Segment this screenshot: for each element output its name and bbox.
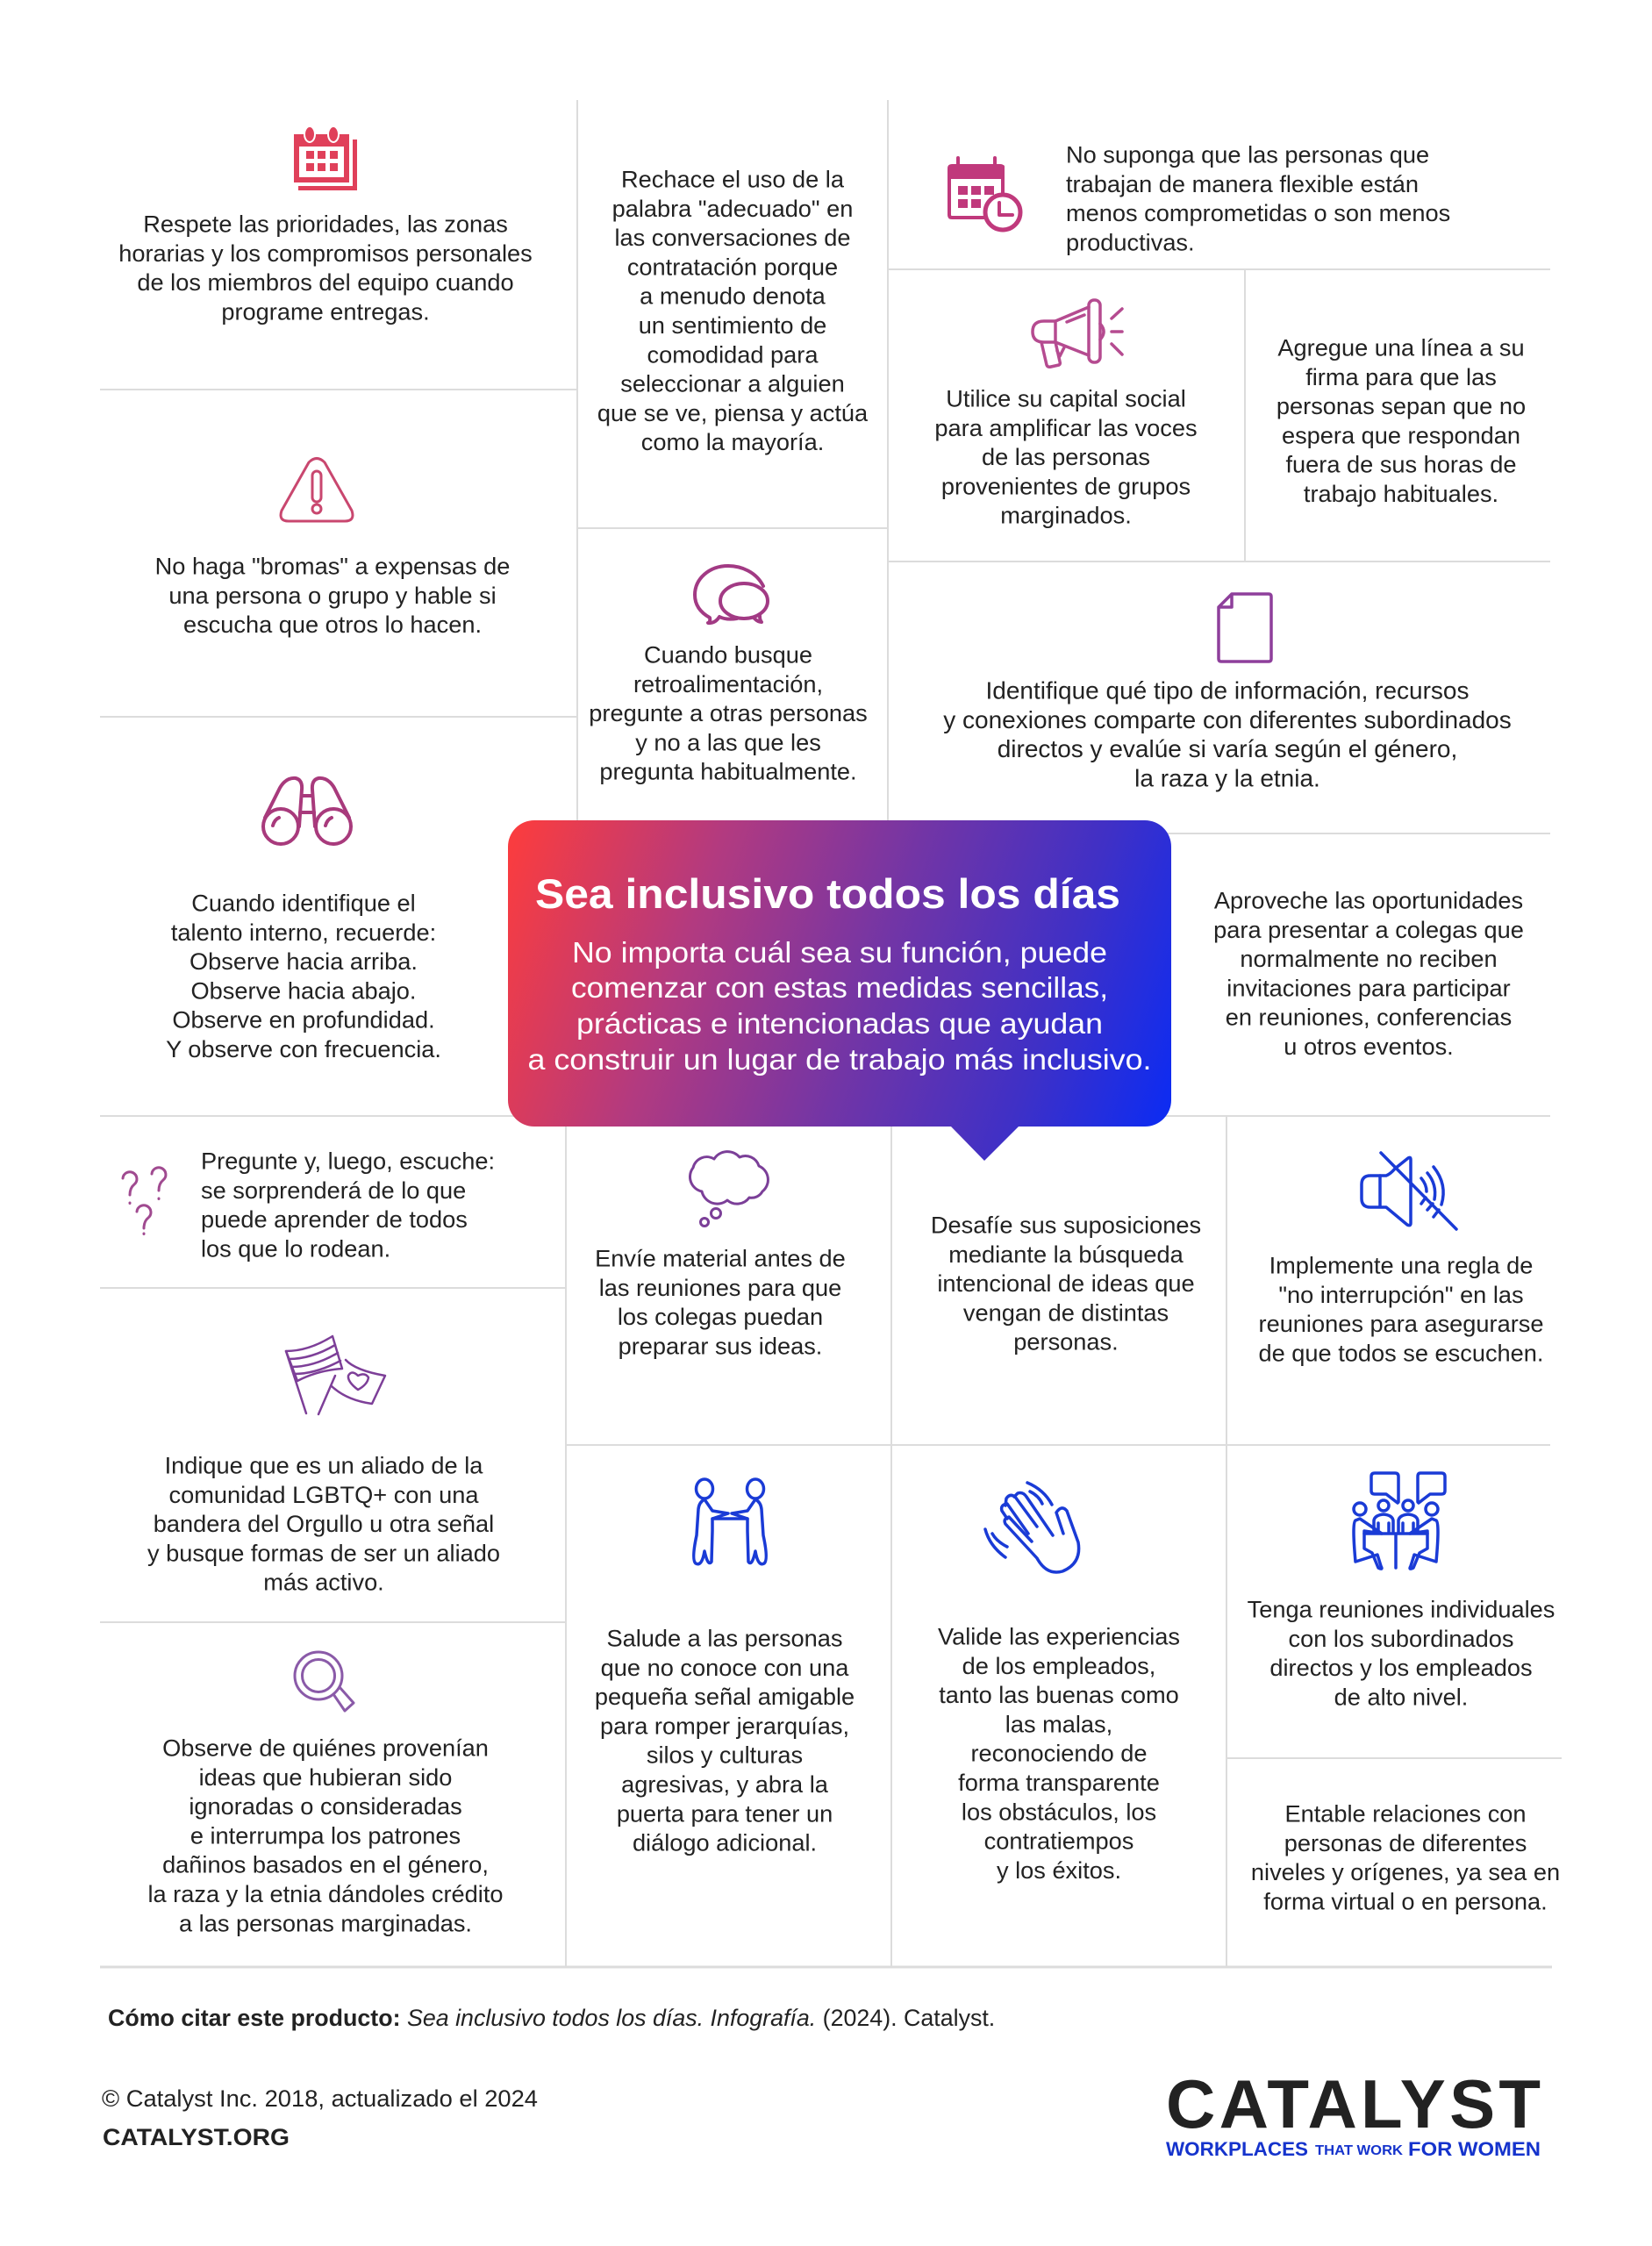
text: ask and listen: Pregunte y, luego, escuche: xyxy=(201,1148,495,1174)
text: observe whose ideas: ideas que hubieran sido xyxy=(199,1763,452,1791)
text: email signature: Agregue una línea a su xyxy=(1277,333,1525,361)
icon: megaphone xyxy=(1033,300,1122,367)
text: challenge assumptions: mediante la búsqueda xyxy=(948,1241,1184,1268)
icon: thought cloud xyxy=(690,1152,768,1227)
text: observe whose ideas: ignoradas o consideradas xyxy=(189,1792,462,1820)
callout: central title box xyxy=(508,820,1171,1161)
text: no interruption: "no interrupción" en las xyxy=(1278,1281,1524,1308)
text: respect priorities: Respete las prioridades, las zonas xyxy=(143,211,508,237)
text: greet people: diálogo adicional. xyxy=(633,1829,817,1856)
panel: respect priorities xyxy=(118,126,533,325)
text: observe whose ideas: la raza y la etnia dándoles crédito xyxy=(147,1880,504,1907)
text: LGBTQ ally: más activo. xyxy=(263,1569,384,1596)
text: social capital: provenientes de grupos xyxy=(941,472,1191,499)
text: present colleagues: normalmente no reciben xyxy=(1240,945,1498,972)
text: ask and listen: los que lo rodean. xyxy=(201,1234,390,1262)
text: information sharing: directos y evalúe si varía según el género, xyxy=(998,735,1457,762)
text: challenge assumptions: vengan de distintas xyxy=(963,1298,1169,1326)
logo: Catalyst: WORKPLACES xyxy=(1166,2138,1308,2160)
text: seek feedback: Cuando busque xyxy=(644,640,812,669)
text: ask and listen: se sorprenderá de lo que xyxy=(201,1177,466,1204)
panel: LGBTQ ally xyxy=(147,1336,500,1596)
text: challenge assumptions: Desafíe sus suposiciones xyxy=(931,1211,1201,1239)
logo: Catalyst: CATALYST xyxy=(1166,2065,1541,2142)
icon: question marks xyxy=(123,1168,166,1234)
text: LGBTQ ally: comunidad LGBTQ+ con una xyxy=(169,1481,479,1508)
text: present colleagues: invitaciones para participar xyxy=(1226,974,1511,1001)
text: one-on-one meetings: directos y los empleados xyxy=(1269,1654,1533,1681)
text: present colleagues: para presentar a colegas que xyxy=(1213,916,1524,943)
text: information sharing: y conexiones comparte con diferentes subordinados xyxy=(943,706,1512,733)
text: observe whose ideas: e interrumpa los patrones xyxy=(190,1821,461,1849)
text: validate experiences: contratiempos xyxy=(984,1828,1134,1855)
text: no jokes: No haga "bromas" a expensas de xyxy=(155,553,510,579)
text: present colleagues: u otros eventos. xyxy=(1284,1033,1454,1060)
text: respect priorities: programe entregas. xyxy=(221,297,430,325)
text: identify talent: Observe en profundidad. xyxy=(172,1006,435,1034)
text: present colleagues: Aproveche las oportunidades xyxy=(1214,886,1523,914)
copyright: © Catalyst Inc. 2018, actualizado el 2024 xyxy=(102,2085,538,2112)
text: social capital: para amplificar las voces xyxy=(934,414,1198,441)
text: email signature: trabajo habituales. xyxy=(1304,480,1498,507)
text: seek feedback: pregunta habitualmente. xyxy=(599,758,857,785)
text: validate experiences: de los empleados, xyxy=(962,1652,1155,1679)
text: reject the word adecuado: como la mayoría. xyxy=(641,428,824,455)
text: no jokes: una persona o grupo y hable si xyxy=(168,582,497,609)
website: CATALYST.ORG xyxy=(103,2124,290,2150)
icon: document xyxy=(1219,594,1271,662)
icon: magnifier xyxy=(295,1652,354,1711)
icon: muted speaker xyxy=(1362,1153,1456,1229)
text: reject the word adecuado: Rechace el uso de la xyxy=(621,165,845,193)
callout text: comenzar con estas medidas sencillas, xyxy=(571,971,1108,1004)
text: one-on-one meetings: Tenga reuniones individuales xyxy=(1248,1595,1555,1623)
text: challenge assumptions: intencional de ideas que xyxy=(937,1270,1195,1297)
text: send material: los colegas puedan xyxy=(618,1303,823,1330)
icon: red calendar xyxy=(294,126,357,190)
text: validate experiences: Valide las experiencias xyxy=(938,1623,1180,1649)
text: send material: Envíe material antes de xyxy=(595,1244,846,1272)
text: reject the word adecuado: comodidad para xyxy=(647,340,819,368)
text: email signature: firma para que las xyxy=(1305,363,1497,390)
text: build relationships: niveles y orígenes, ya sea en xyxy=(1251,1858,1560,1885)
icon: pride flags xyxy=(286,1336,385,1414)
text: ask and listen: puede aprender de todos xyxy=(201,1205,468,1233)
text: no jokes: escucha que otros lo hacen. xyxy=(183,611,482,638)
text: validate experiences: y los éxitos. xyxy=(997,1856,1121,1884)
text: social capital: marginados. xyxy=(1000,502,1132,529)
text: identify talent: talento interno, recuerde: xyxy=(171,919,436,946)
text: seek feedback: pregunte a otras personas xyxy=(589,699,868,726)
icon: speech bubbles xyxy=(695,566,768,623)
panel: send material xyxy=(595,1152,846,1359)
panel: one-on-one meetings xyxy=(1248,1473,1555,1710)
text: seek feedback: retroalimentación, xyxy=(633,670,823,697)
panel: greet people xyxy=(595,1479,855,1856)
callout text: a construir un lugar de trabajo más inclusivo. xyxy=(528,1043,1151,1076)
text: build relationships: Entable relaciones con xyxy=(1284,1800,1527,1827)
text: observe whose ideas: a las personas marginadas. xyxy=(179,1909,472,1936)
callout text xyxy=(528,936,1151,1076)
text: identify talent: Y observe con frecuencia. xyxy=(166,1035,441,1062)
text: greet people: para romper jerarquías, xyxy=(600,1712,849,1739)
text: email signature: espera que respondan xyxy=(1282,421,1520,448)
text: identify talent: Observe hacia abajo. xyxy=(191,976,416,1004)
text: validate experiences: forma transparente xyxy=(958,1769,1160,1796)
text: greet people: agresivas, y abra la xyxy=(621,1770,829,1798)
text: information sharing: Identifique qué tipo de información, recursos xyxy=(986,677,1469,704)
text: reject the word adecuado: un sentimiento de xyxy=(639,311,826,339)
citation: Cómo citar este producto: Sea inclusivo todos los días. Infografía. (2024). Catalyst. xyxy=(108,2005,995,2031)
text: email signature: fuera de sus horas de xyxy=(1286,451,1516,478)
text: flexible workers: No suponga que las personas que xyxy=(1066,140,1429,168)
text: validate experiences: reconociendo de xyxy=(970,1740,1148,1767)
text: seek feedback: y no a las que les xyxy=(635,728,821,755)
text: observe whose ideas: Observe de quiénes provenían xyxy=(162,1734,489,1762)
text: greet people: pequeña señal amigable xyxy=(595,1683,855,1710)
logo: Catalyst: THAT WORK xyxy=(1315,2143,1403,2158)
text: identify talent: Cuando identifique el xyxy=(191,890,416,916)
text: send material: preparar sus ideas. xyxy=(619,1332,822,1359)
text: no interruption: Implemente una regla de xyxy=(1269,1251,1533,1279)
text: reject the word adecuado: seleccionar a alguien xyxy=(620,370,845,397)
text: email signature: personas sepan que no xyxy=(1277,392,1526,419)
panel: flexible workers xyxy=(949,140,1450,255)
text: no interruption: de que todos se escuchen. xyxy=(1259,1339,1543,1366)
panel: information sharing xyxy=(943,594,1512,791)
icon: two people shaking hands xyxy=(694,1479,766,1564)
text: respect priorities: de los miembros del equipo cuando xyxy=(137,268,514,296)
text: one-on-one meetings: con los subordinados xyxy=(1289,1625,1513,1652)
panel: observe whose ideas xyxy=(147,1652,504,1936)
text: LGBTQ ally: Indique que es un aliado de la xyxy=(165,1451,483,1479)
title: Sea inclusivo todos los días xyxy=(535,870,1120,917)
text: greet people: Salude a las personas xyxy=(606,1625,843,1651)
text: social capital: de las personas xyxy=(982,443,1150,470)
text: greet people: que no conoce con una xyxy=(601,1654,849,1681)
text: validate experiences: las malas, xyxy=(1005,1710,1112,1737)
callout text: No importa cuál sea su función, puede xyxy=(572,936,1107,969)
panel: identify talent xyxy=(166,778,441,1062)
text: reject the word adecuado: las conversaciones de xyxy=(614,224,851,251)
text: send material: las reuniones para que xyxy=(599,1274,841,1301)
text: no interruption: reuniones para asegurarse xyxy=(1259,1310,1543,1337)
text: LGBTQ ally: y busque formas de ser un aliado xyxy=(147,1539,500,1566)
icon: binoculars xyxy=(263,778,351,844)
text: greet people: silos y culturas xyxy=(647,1742,803,1769)
text: challenge assumptions: personas. xyxy=(1013,1328,1119,1355)
text: build relationships: personas de diferentes xyxy=(1284,1829,1527,1856)
text: flexible workers: productivas. xyxy=(1066,228,1195,255)
panel: no jokes xyxy=(155,458,510,638)
text: build relationships: forma virtual o en persona. xyxy=(1263,1887,1548,1914)
text: reject the word adecuado: contratación porque xyxy=(627,253,838,280)
callout text: prácticas e intencionadas que ayudan xyxy=(576,1007,1103,1040)
text: information sharing: la raza y la etnia. xyxy=(1134,764,1320,791)
icon: team meeting xyxy=(1354,1473,1445,1569)
icon: waving hand xyxy=(985,1483,1079,1572)
panel: seek feedback xyxy=(589,566,868,785)
text: flexible workers: trabajan de manera flexible están xyxy=(1066,170,1419,197)
panel: ask and listen xyxy=(123,1148,495,1262)
text: present colleagues: en reuniones, conferencias xyxy=(1226,1004,1512,1031)
panel: social capital xyxy=(934,300,1198,529)
text: reject the word adecuado: palabra "adecuado" en xyxy=(612,195,853,222)
text: observe whose ideas: dañinos basados en el género, xyxy=(162,1851,489,1878)
panel: validate experiences xyxy=(938,1483,1180,1884)
logo: Catalyst: FOR WOMEN xyxy=(1408,2138,1541,2160)
icon: warning triangle xyxy=(281,458,353,521)
text: one-on-one meetings: de alto nivel. xyxy=(1334,1683,1468,1710)
text: respect priorities: horarias y los compromisos personales xyxy=(118,240,533,267)
text: reject the word adecuado: a menudo denota xyxy=(640,283,826,310)
text: greet people: puerta para tener un xyxy=(617,1799,833,1827)
text: validate experiences: los obstáculos, los xyxy=(962,1798,1156,1825)
text: flexible workers: menos comprometidas o son menos xyxy=(1066,199,1450,226)
text: LGBTQ ally: bandera del Orgullo u otra señal xyxy=(154,1510,494,1537)
panel: no interruption xyxy=(1259,1153,1543,1366)
icon: calendar with clock xyxy=(949,158,1020,230)
text: reject the word adecuado: que se ve, piensa y actúa xyxy=(597,399,869,426)
text: identify talent: Observe hacia arriba. xyxy=(190,948,418,975)
text: validate experiences: tanto las buenas como xyxy=(939,1681,1179,1708)
text: social capital: Utilice su capital social xyxy=(946,384,1186,412)
